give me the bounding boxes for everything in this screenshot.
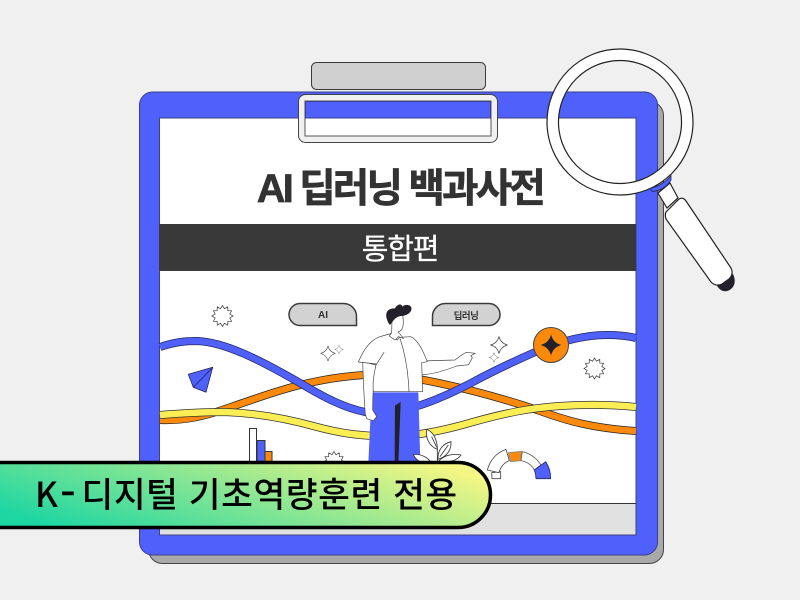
banner text: - <box>60 459 76 523</box>
magnifier ring <box>547 49 693 195</box>
icon: burst lower <box>324 452 344 472</box>
donut gauge <box>487 449 551 479</box>
subtitle: 통합편 <box>362 233 438 266</box>
icon: burst right <box>584 358 605 379</box>
magnifier handle <box>665 198 732 285</box>
person shirt placket <box>400 338 409 392</box>
title: AI 딥러닝 백과사전 <box>257 167 543 211</box>
person trouser shadow <box>395 402 401 463</box>
magnifier <box>547 49 735 291</box>
magnifier connector <box>658 183 678 208</box>
person hair <box>386 305 412 325</box>
icon: sparkles left <box>320 345 343 361</box>
curve: yellow ribbon <box>160 405 636 436</box>
person collar <box>389 333 403 340</box>
banner text: 디지털 기초역량훈련 전용 <box>82 467 458 517</box>
person back arm <box>422 352 475 375</box>
person illustration <box>358 305 475 463</box>
magnifier collar <box>650 176 671 192</box>
banner text: K <box>35 467 58 517</box>
person neck and face <box>390 313 403 340</box>
mini bar chart <box>250 428 272 462</box>
pill label: deep learning <box>432 303 500 326</box>
clip frame <box>298 94 498 142</box>
subtitle bar <box>159 224 636 271</box>
clip top tab <box>312 62 486 90</box>
clipboard blue board <box>140 92 658 555</box>
icon: burst left <box>212 306 233 326</box>
icon: orange star badge <box>534 328 568 362</box>
curve: orange ribbon <box>160 375 636 431</box>
person shirt <box>358 334 427 392</box>
magnifier handle tip <box>716 274 735 291</box>
clipboard shadow panel <box>148 102 664 564</box>
person front arm <box>363 362 377 421</box>
pill label: AI <box>289 303 357 326</box>
banner <box>0 459 490 528</box>
curve: blue ribbon <box>160 335 636 413</box>
paper sheet <box>160 118 636 535</box>
pill label: AI: AI <box>318 310 328 321</box>
person trousers <box>368 392 420 463</box>
icon: sparkles right <box>489 336 508 362</box>
pill label: deep learning: 딥러닝 <box>454 310 478 322</box>
icon: paper plane <box>188 367 213 392</box>
plant leaves <box>413 429 461 464</box>
